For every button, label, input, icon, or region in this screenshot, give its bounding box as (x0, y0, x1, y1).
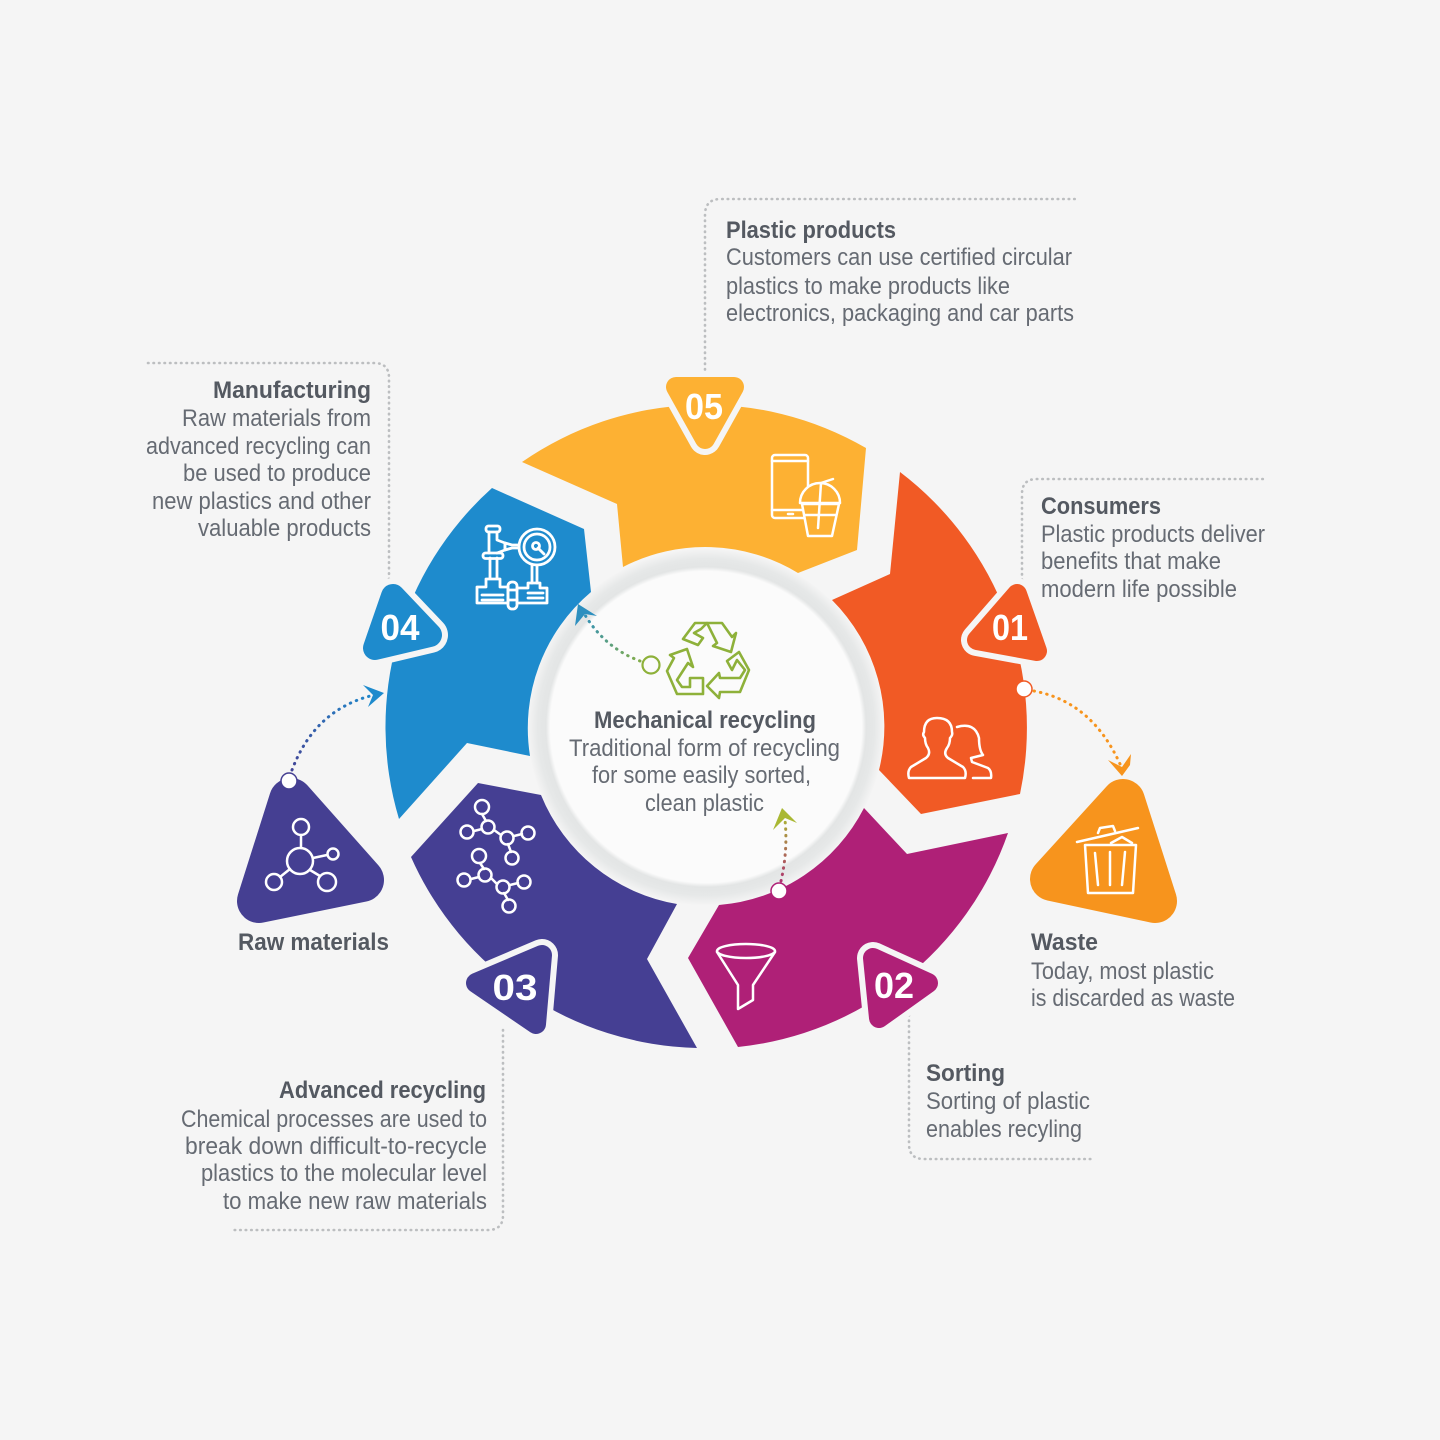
dotted leader: plastic products (705, 199, 1075, 375)
badge 01 (977, 594, 1037, 651)
text: plastic products (726, 217, 1074, 327)
badge 03 (476, 955, 542, 1024)
text: sorting: enables recyling (926, 1116, 1082, 1143)
text: advanced recycling: to make new raw materials (223, 1188, 487, 1215)
arrow: consumers to waste (1016, 681, 1131, 776)
text: sorting: Sorting (926, 1060, 1005, 1087)
text: waste: is discarded as waste (1031, 985, 1235, 1012)
badge 02: 02 (874, 965, 914, 1006)
text: mechanical recycling: Traditional form of recycling (569, 735, 840, 762)
dotted leader: advanced recycling (230, 1030, 503, 1230)
badge 04: 04 (380, 607, 420, 648)
text: advanced recycling: Advanced recycling (279, 1077, 486, 1104)
dotted leader: manufacturing (148, 363, 389, 582)
segment: manufacturing (blue) (385, 488, 591, 819)
waste triangle with bin icon (1052, 801, 1155, 901)
segment: plastic products (yellow) (522, 405, 866, 573)
text: raw materials: Raw materials (238, 929, 389, 956)
text: sorting: Sorting of plastic (926, 1088, 1090, 1115)
segment: consumers (orange) (832, 472, 1027, 814)
icon: people (908, 718, 991, 778)
arrow: mechanical recycling to manufacturing (575, 604, 660, 674)
text: consumers: modern life possible (1041, 576, 1237, 603)
text: manufacturing: valuable products (198, 515, 371, 542)
badge 05 (676, 386, 734, 439)
text: mechanical recycling: Mechanical recycling (594, 707, 816, 734)
text: manufacturing: advanced recycling can (146, 433, 371, 460)
dotted leader: sorting (909, 1015, 1095, 1159)
segment: sorting (magenta) (688, 808, 1008, 1047)
text: waste: Today, most plastic (1031, 958, 1214, 985)
centre circle (528, 549, 884, 905)
text: consumers: benefits that make (1041, 548, 1221, 575)
text: plastic products: plastics to make products like (726, 273, 1010, 300)
text: plastic products: Customers can use certified circular (726, 244, 1072, 271)
text: manufacturing: Raw materials from (182, 405, 371, 432)
text: advanced recycling: break down difficult-to-recycle (185, 1133, 487, 1160)
icon: molecules (458, 800, 534, 912)
segment: advanced recycling (purple) (411, 783, 697, 1048)
badge 04 (375, 596, 430, 648)
text: mechanical recycling (569, 707, 840, 817)
text: advanced recycling: plastics to the molecular level (201, 1160, 487, 1187)
text: manufacturing: be used to produce (183, 460, 371, 487)
arrow: sorting to mechanical recycling (771, 808, 797, 899)
text: waste (1031, 929, 1235, 1012)
badge 01: 01 (992, 607, 1028, 648)
text: manufacturing: new plastics and other (152, 488, 371, 515)
arrow: raw materials to manufacturing (281, 685, 384, 789)
badge 03: 03 (492, 967, 538, 1008)
dotted leader: consumers (1022, 479, 1265, 580)
text: mechanical recycling: for some easily sorted, (592, 762, 811, 789)
text: consumers (1041, 493, 1265, 603)
icon: recycling symbol (667, 623, 749, 698)
text: manufacturing: Manufacturing (213, 377, 371, 404)
badge 05: 05 (685, 386, 723, 427)
badge 02 (873, 958, 928, 1018)
text: plastic products: Plastic products (726, 217, 896, 244)
text: sorting (926, 1060, 1090, 1143)
text: advanced recycling: Chemical processes are used to (181, 1106, 487, 1133)
icon: phone and cup (772, 455, 840, 536)
text: plastic products: electronics, packaging and car parts (726, 300, 1074, 327)
text: mechanical recycling: clean plastic (645, 790, 764, 817)
raw materials triangle with molecule icon (259, 800, 362, 901)
text: manufacturing (146, 377, 371, 542)
icon: funnel (717, 944, 775, 1009)
text: advanced recycling (181, 1077, 487, 1215)
text: consumers: Consumers (1041, 493, 1161, 520)
icon: manufacturing machine (477, 526, 555, 609)
text: consumers: Plastic products deliver (1041, 521, 1265, 548)
text: waste: Waste (1031, 929, 1098, 956)
